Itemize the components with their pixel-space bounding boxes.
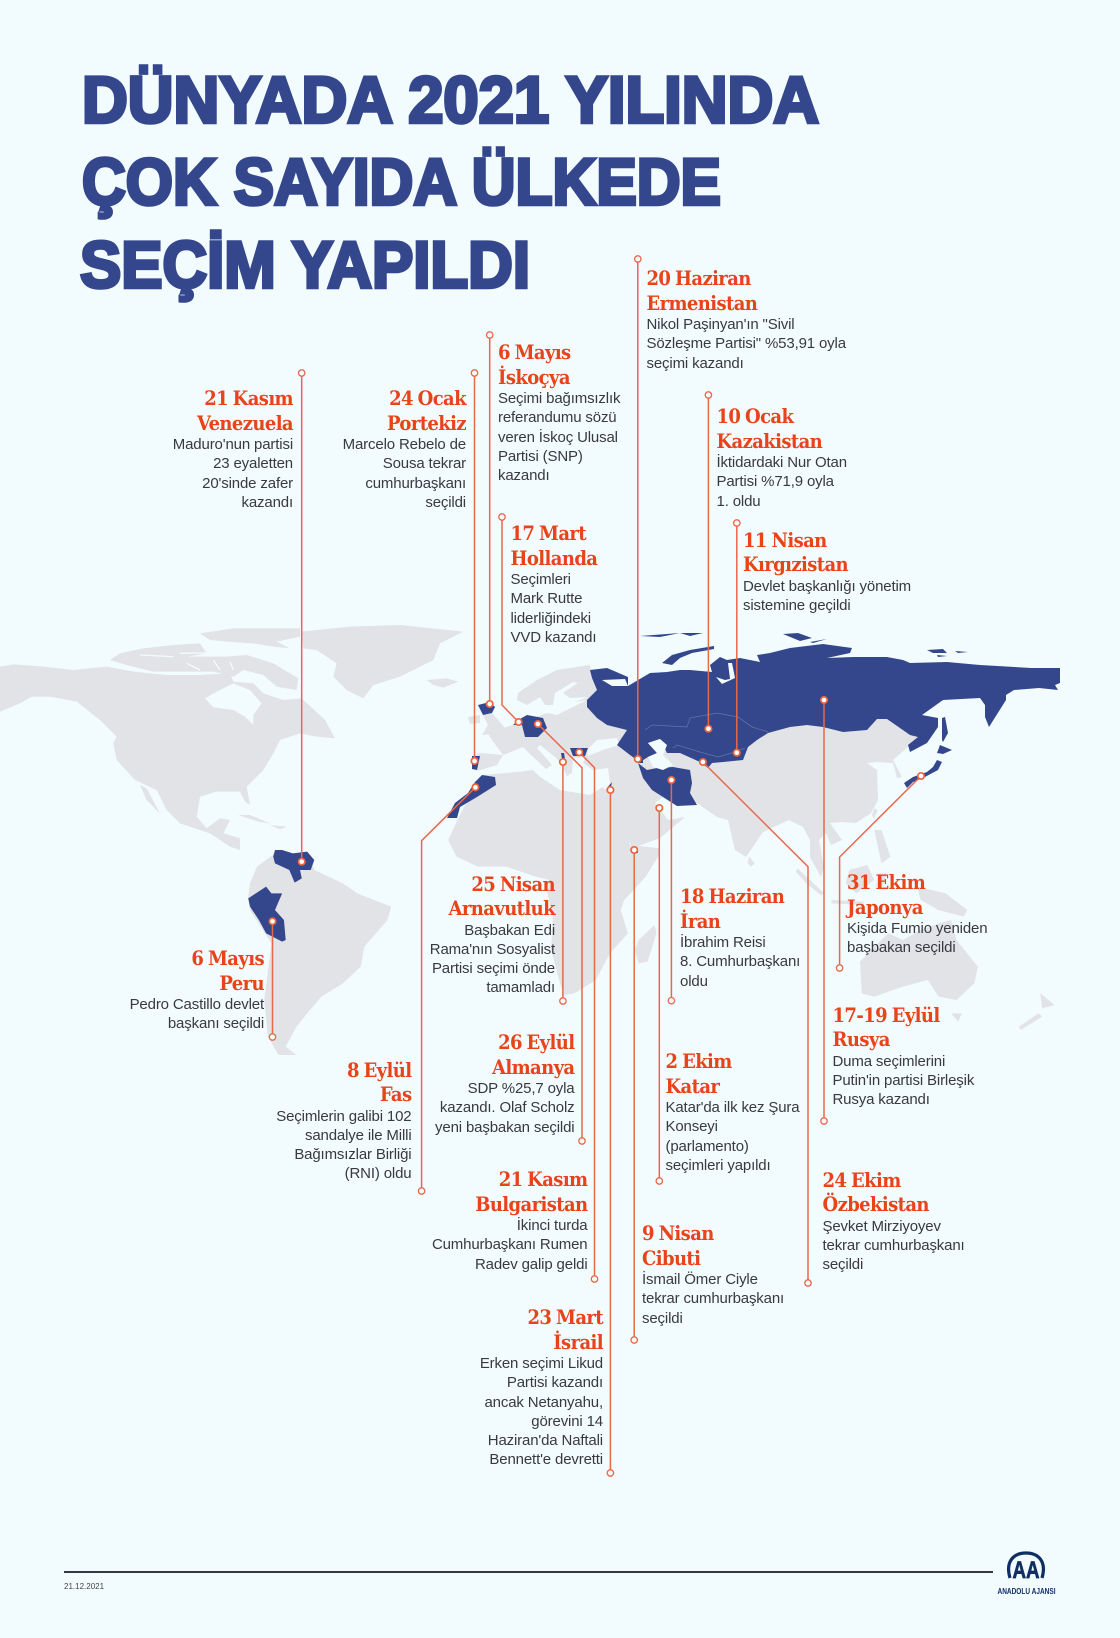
callout: İskoçya: kazandı [498,467,550,484]
country: Morocco [447,775,496,818]
callout: Kazakistan: 10 Ocak [716,404,793,428]
logo: Anadolu Ajansı: AA [1012,1557,1040,1584]
callout: Fas: Fas [380,1082,412,1106]
map: Black Sea [587,738,619,756]
callout: İran: İbrahim Reisi [680,934,766,951]
callout: Kazakistan: Partisi %71,9 oyla [716,473,834,490]
country: Armenia [636,757,643,763]
callout: Peru: Pedro Castillo devlet [130,996,264,1013]
callout: Katar: seçimleri yapıldı [666,1157,770,1174]
callout: Kazakistan: İktidardaki Nur Otan [716,454,847,471]
callout: Venezuela: 23 eyaletten [213,455,293,472]
callout: İskoçya: Seçimi bağımsızlık [498,390,620,407]
map: White Sea, Ob Gulf, Caspian Sea [602,663,735,770]
callout: İskoçya [498,340,620,484]
callout: İskoçya: referandumu sözü [498,409,617,426]
callout: Özbekistan: Özbekistan [822,1192,929,1216]
country: Israel [608,782,612,792]
callout: Japonya: Japonya [847,894,923,918]
country: Arctic islands [640,633,968,657]
callout: Japonya: Kişida Fumio yeniden [847,920,987,937]
callout: Rusya: Duma seçimlerini [832,1052,945,1070]
callout: İsrail [480,1305,604,1468]
country: Albania [561,753,565,759]
country: Novaya Zemlya [662,646,714,665]
callout: Portekiz: Sousa tekrar [383,455,466,472]
callout: Cibuti: seçildi [642,1310,683,1327]
leader lines [272,259,921,1473]
callout: Arnavutluk: Başbakan Edi [464,922,555,938]
date: 21.12.2021 [64,1582,104,1591]
map: Africa and Oceania [448,770,1055,1030]
callout: Katar: Katar'da ilk kez Şura [666,1099,799,1116]
map: North America and Greenland [0,625,463,850]
callout: Ermenistan: seçimi kazandı [646,355,744,372]
title [80,64,820,303]
map: Eurasia and Britain [468,665,918,877]
callout: İsrail: 23 Mart [528,1305,603,1329]
callout: Hollanda: Hollanda [510,546,597,570]
callout: Cibuti: tekrar cumhurbaşkanı [642,1290,784,1307]
country: Russia and Central Asia [587,644,1060,768]
callout: Rusya: Putin'in partisi Birleşik [832,1072,974,1089]
callout: Kazakistan: 1. oldu [716,493,760,510]
callout: Katar: 2 Ekim [666,1049,732,1073]
callout: Ermenistan: Ermenistan [646,290,757,314]
callout: Rusya: Rusya kazandı [832,1091,930,1108]
callout: Özbekistan: 24 Ekim [822,1168,901,1192]
callout: Kırgızistan: Kırgızistan [743,552,848,576]
country: Iran [638,763,697,806]
country: Peru [248,887,286,942]
callout: Fas: sandalye ile Milli [305,1127,412,1144]
callout: İsrail: Haziran'da Naftali [488,1432,603,1449]
callout: Bulgaristan: Bulgaristan [475,1192,588,1216]
callout: Venezuela: 21 Kasım [204,386,293,410]
callout: Japonya: başbakan seçildi [847,939,956,956]
callout: Portekiz: Portekiz [387,410,466,434]
callout: Bulgaristan: Cumhurbaşkanı Rumen [432,1236,588,1253]
country: Bulgaria [570,748,588,756]
callout: Arnavutluk [430,872,556,996]
callout: İran: İran [680,908,720,932]
callout: Özbekistan [822,1168,965,1273]
callout: Kazakistan: Kazakistan [716,428,822,452]
callout: Hollanda: 17 Mart [510,521,586,545]
callout: Hollanda: Seçimleri [510,571,571,588]
callout: Arnavutluk: tamamladı [486,979,555,996]
callout: Kırgızistan: Devlet başkanlığı yönetim [743,578,911,594]
callout: İran: 18 Haziran [680,884,784,908]
logo: Anadolu Ajansı: ANADOLU AJANSI [998,1587,1056,1596]
callout: Bulgaristan: 21 Kasım [499,1167,588,1191]
callout: Katar [666,1049,800,1174]
map: Arctic channels and Hudson Bay [140,645,262,725]
callout: Rusya: Rusya [832,1027,890,1051]
line end markers [269,256,843,1476]
country: Germany and Netherlands [513,715,547,737]
callout: Ermenistan: Nikol Paşinyan'ın "Sivil [646,316,794,333]
callout: Venezuela: Maduro'nun partisi [173,436,293,453]
callout: İsrail: görevini 14 [531,1413,603,1430]
map: South America [248,853,391,1055]
callout: Arnavutluk: 25 Nisan [471,872,555,896]
callout: Hollanda [510,521,598,646]
callout: Özbekistan: tekrar cumhurbaşkanı [822,1237,965,1254]
callout: İsrail: Partisi kazandı [507,1374,603,1391]
callout: Venezuela: 20'sinde zafer [202,475,293,492]
callout: Bulgaristan: Radev galip geldi [475,1256,588,1273]
map: Central Asia borders [645,713,768,757]
callout: Rusya: 17-19 Eylül [832,1002,940,1026]
callout: Katar: Katar [666,1074,719,1098]
callout: Arnavutluk: Arnavutluk [449,896,555,920]
callout: Japonya [846,870,987,956]
callout: Portekiz [343,386,467,511]
callout: Kazakistan [716,404,847,510]
callout: Hollanda: liderliğindeki [510,610,591,627]
callout: Özbekistan: seçildi [822,1256,863,1273]
country: Scotland [478,702,495,715]
callout: Arnavutluk: Partisi seçimi önde [432,960,555,977]
callout: Fas: (RNI) oldu [345,1165,412,1182]
callout: İran: 8. Cumhurbaşkanı [680,953,800,970]
callout: Almanya: 26 Eylül [498,1030,574,1054]
callout: Peru: Peru [219,970,264,994]
callout: Venezuela: Venezuela [197,410,293,434]
country: Venezuela [273,850,314,883]
callout: Hollanda: VVD kazandı [510,629,596,646]
callout: Rusya [832,1002,974,1108]
callout: İsrail: Erken seçimi Likud [480,1355,603,1372]
callout: Peru [130,946,264,1032]
callout: Katar: Konseyi [666,1118,718,1135]
callout: Portekiz: seçildi [425,494,466,511]
callout: Fas [276,1058,412,1182]
callout: Özbekistan: Şevket Mirziyoyev [822,1218,941,1234]
callout: Peru: başkanı seçildi [168,1015,264,1032]
callout: İskoçya: İskoçya [498,364,570,388]
callout: Almanya: yeni başbakan seçildi [435,1119,574,1136]
callout: İskoçya: Partisi (SNP) [498,448,583,465]
callout: İskoçya: 6 Mayıs [498,340,571,364]
callout: Almanya: Almanya [492,1054,574,1078]
callout: Bulgaristan: İkinci turda [517,1217,588,1234]
callout: Fas: Bağımsızlar Birliği [294,1146,412,1163]
callout: Kırgızistan: 11 Nisan [743,528,827,552]
country: Japan [904,745,952,788]
callout: İran [680,884,800,990]
callout: Venezuela: kazandı [242,494,293,511]
callout: Hollanda: Mark Rutte [510,590,582,607]
callout: Cibuti: Cibuti [642,1246,700,1270]
map: highlighted countries [248,633,1060,942]
callout: Venezuela [173,386,294,511]
callout: Portekiz: cumhurbaşkanı [365,475,466,492]
callout: İran: oldu [680,973,708,990]
callout: Cibuti: İsmail Ömer Ciyle [642,1271,758,1288]
callout: Almanya [435,1030,575,1136]
callout: Katar: (parlamento) [666,1138,749,1155]
callout: Fas: Seçimlerin galibi 102 [276,1108,412,1124]
callout: Almanya: SDP %25,7 oyla [468,1080,574,1097]
callout: Kırgızistan: sistemine geçildi [743,597,850,614]
callout: Japonya: 31 Ekim [847,870,925,894]
callout: Cibuti: 9 Nisan [642,1221,714,1245]
callout: Cibuti [642,1221,784,1327]
country: Djibouti [631,847,638,853]
callout: İsrail: Bennett'e devretti [489,1451,603,1468]
callout: İsrail: İsrail [553,1330,603,1354]
title: ÇOK SAYIDA ÜLKEDE [82,146,721,218]
callout: Almanya: kazandı. Olaf Scholz [440,1099,574,1116]
callout: Peru: 6 Mayıs [191,946,264,970]
markers on the map [269,697,924,924]
callout: Ermenistan: 20 Haziran [646,266,751,290]
callout: İskoçya: veren İskoç Ulusal [498,429,618,446]
country: Portugal [472,756,480,770]
callout: Kırgızistan [743,528,911,614]
callout: Ermenistan [646,266,846,372]
callout: Ermenistan: Sözleşme Partisi" %53,91 oyla [646,335,846,352]
country: Sakhalin [942,717,948,742]
callout: İsrail: ancak Netanyahu, [484,1394,603,1411]
title: SEÇİM YAPILDI [80,228,530,302]
callout: Portekiz: Marcelo Rebelo de [343,436,466,453]
title: DÜNYADA 2021 YILINDA [82,64,819,136]
callout: Portekiz: 24 Ocak [389,386,466,410]
callout: Arnavutluk: Rama'nın Sosyalist [430,941,555,958]
callout: Bulgaristan [432,1167,588,1273]
callout: Fas: 8 Eylül [347,1058,412,1082]
